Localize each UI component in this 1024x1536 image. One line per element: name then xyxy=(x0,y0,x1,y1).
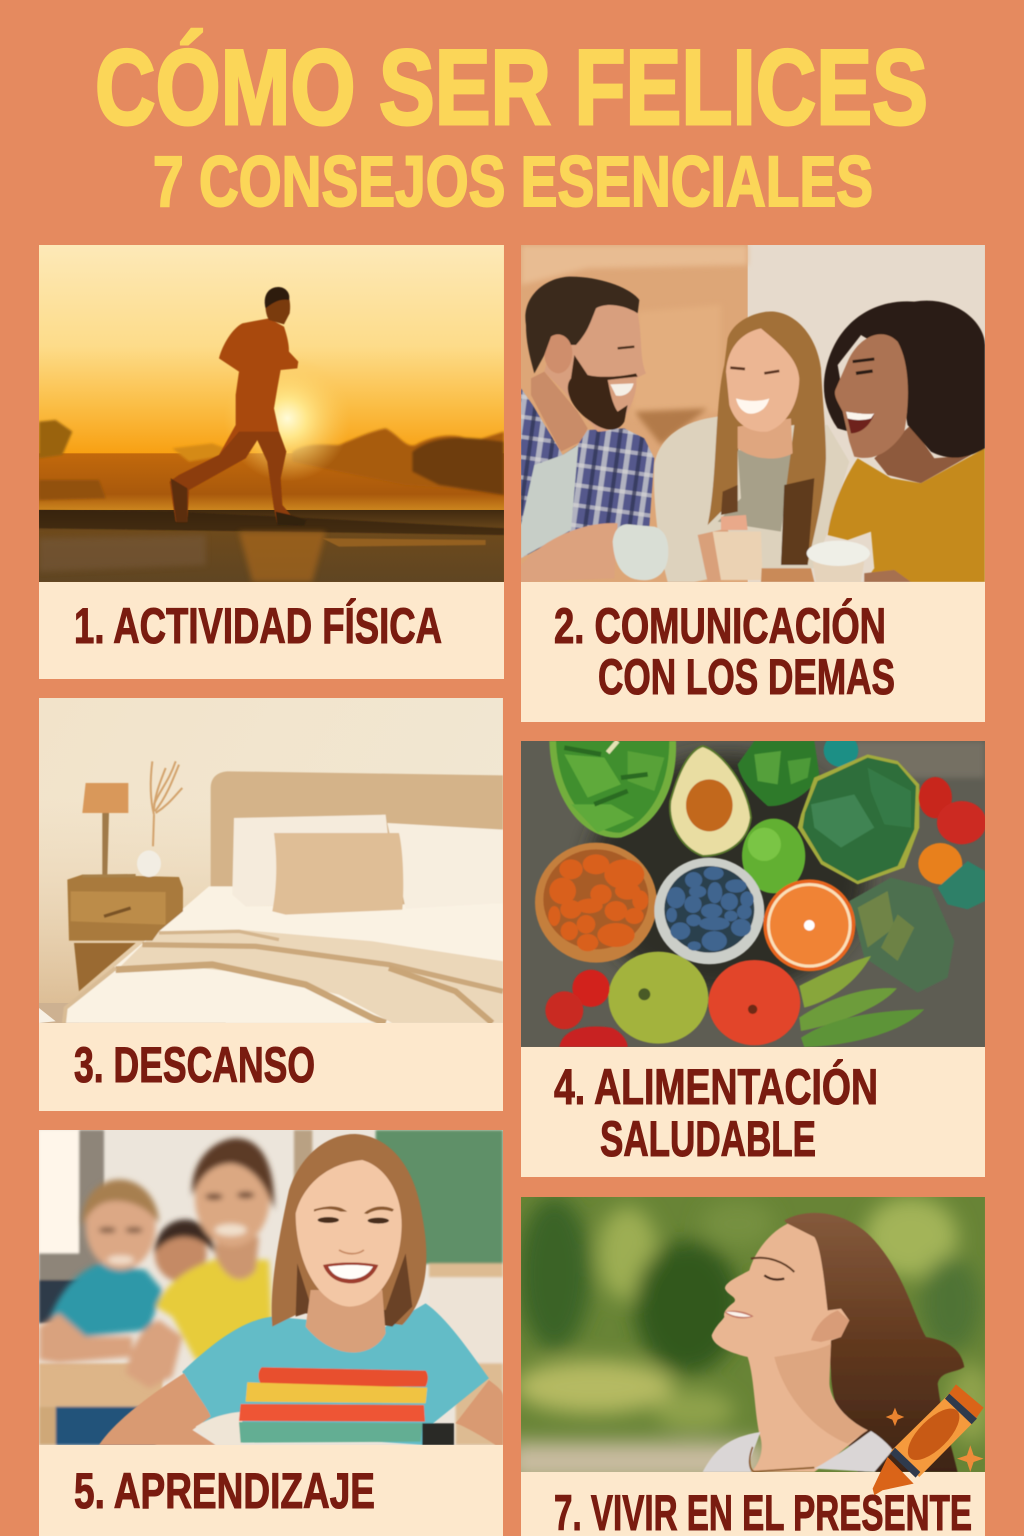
photo: three friends with coffee xyxy=(521,245,985,582)
table and cup: right xyxy=(761,568,814,582)
main child shirt xyxy=(182,1303,489,1445)
apples xyxy=(608,952,708,1044)
panel: 1 actividad física xyxy=(39,245,504,679)
features xyxy=(751,1258,794,1272)
spinach bowl xyxy=(549,741,676,838)
panel: 4 alimentación saludable xyxy=(521,734,986,1177)
label: 5 xyxy=(39,1445,503,1536)
broccoli xyxy=(849,878,954,993)
child middle xyxy=(156,1258,272,1363)
orange slice xyxy=(763,879,855,971)
photo: woman breathing in nature xyxy=(508,1197,994,1482)
label: 4: SALUDABLE xyxy=(600,1111,816,1167)
neck xyxy=(306,1290,386,1353)
lamp xyxy=(82,783,128,813)
panel: 7 vivir en el presente xyxy=(508,1197,994,1536)
face xyxy=(296,1160,402,1307)
photo: fruit and vegetables xyxy=(521,734,986,1047)
pods xyxy=(799,956,871,1008)
label: 3 xyxy=(39,1023,503,1111)
man: face xyxy=(544,304,646,432)
carrot bowl xyxy=(535,843,657,963)
label: 4 xyxy=(521,1047,985,1177)
pepper xyxy=(738,741,819,806)
middle woman: hair xyxy=(708,311,826,565)
label: 4: 4. ALIMENTACIÓN xyxy=(554,1059,878,1115)
right woman: hair xyxy=(824,301,985,458)
panel: 3 descanso xyxy=(39,698,503,1111)
man: hand xyxy=(536,522,618,560)
label: 2 xyxy=(521,582,985,722)
right woman: face xyxy=(835,334,908,458)
nightstand xyxy=(74,943,136,991)
tomatoes right xyxy=(919,777,952,818)
label: 2: 2. COMUNICACIÓN xyxy=(554,598,886,654)
books xyxy=(258,1367,428,1387)
photo: calm bedroom xyxy=(39,698,503,1023)
vase and dried grass xyxy=(137,850,161,877)
right woman: sweater xyxy=(874,425,971,483)
photo: smiling schoolchildren xyxy=(39,1130,503,1445)
label: 5: 5. APRENDIZAJE xyxy=(74,1463,375,1519)
panel: 2 comunicación con los demás xyxy=(521,245,985,722)
man: neck xyxy=(531,372,588,452)
child left xyxy=(49,1263,162,1337)
label: 1: 1. ACTIVIDAD FÍSICA xyxy=(74,598,442,654)
icon: crayon with sparkles xyxy=(873,1384,984,1495)
photo: runner at sunset xyxy=(39,245,504,582)
label: 2: CON LOS DEMAS xyxy=(598,649,895,705)
hair xyxy=(784,1213,964,1472)
arms xyxy=(99,1373,216,1445)
man: mug xyxy=(613,524,668,580)
label: 3: 3. DESCANSO xyxy=(74,1037,315,1093)
icon: runner silhouette xyxy=(170,287,306,526)
cabbage xyxy=(798,754,919,884)
bed xyxy=(64,886,503,1023)
middle woman: cardigan xyxy=(654,417,849,582)
lime xyxy=(742,819,805,893)
cup and hand: middle xyxy=(697,530,729,580)
blueberry bowl xyxy=(654,858,764,964)
hair back xyxy=(272,1134,426,1327)
label: 7 xyxy=(521,1472,985,1536)
face and neck xyxy=(712,1224,868,1472)
pillows xyxy=(387,823,503,909)
shirt xyxy=(703,1432,760,1472)
middle woman: face xyxy=(738,418,793,459)
small child xyxy=(155,1225,207,1282)
avocado xyxy=(670,746,751,856)
panel: 5 aprendizaje xyxy=(39,1130,503,1536)
blanket xyxy=(116,930,503,1023)
man: shirt xyxy=(521,388,654,558)
label: 1 xyxy=(39,582,504,679)
cherry tomatoes xyxy=(572,970,610,1007)
headboard xyxy=(211,771,503,905)
